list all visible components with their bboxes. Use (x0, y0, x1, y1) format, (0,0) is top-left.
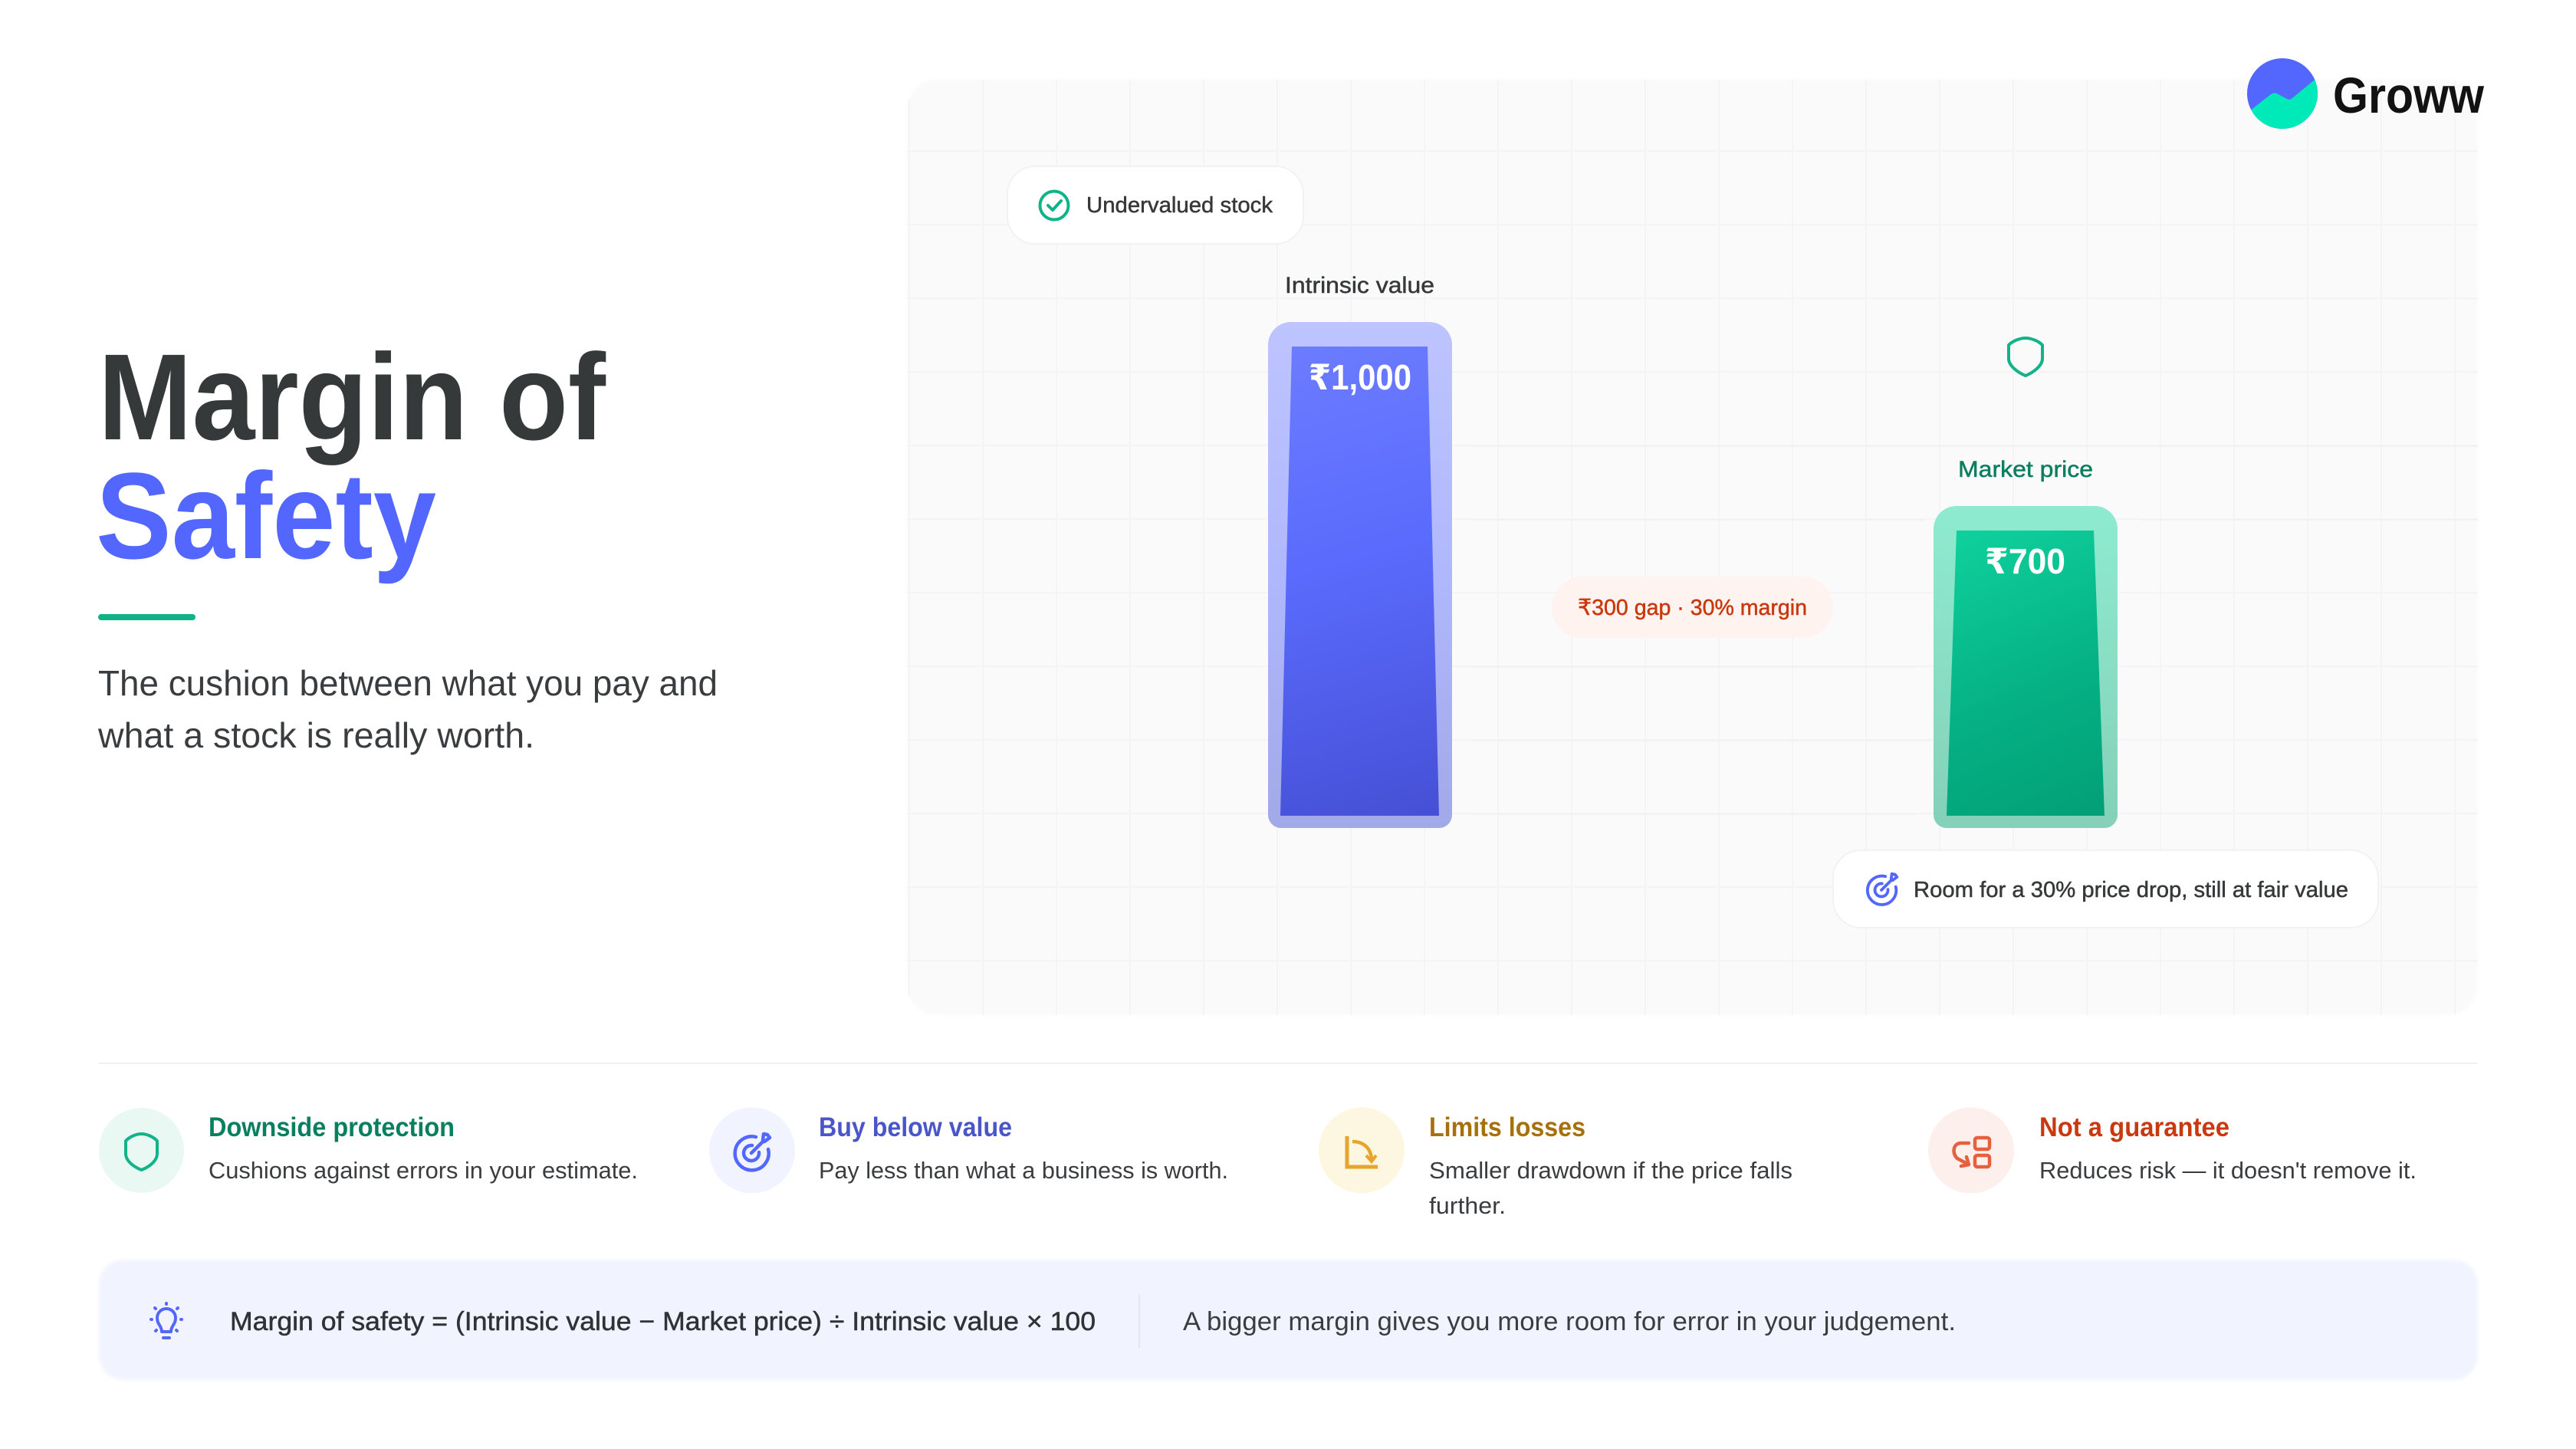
divider (98, 1063, 2478, 1064)
title: Margin of (98, 328, 606, 465)
subtitle: The cushion between what you pay and (98, 663, 718, 703)
logo: Groww (2242, 58, 2485, 134)
description: Reduces risk — it doesn't remove it. (2039, 1157, 2417, 1184)
bar label: Intrinsic value (1285, 273, 1434, 298)
chip: room for a price drop (1833, 850, 2378, 928)
gap pill: ₹300 gap · 30% margin (1578, 596, 1807, 620)
accent bar (98, 614, 196, 620)
bar value: ₹700 (1985, 541, 2065, 581)
formula: Margin of safety = (Intrinsic value − Market price) ÷ Intrinsic value × 100 (230, 1307, 1096, 1336)
subtitle: what a stock is really worth. (97, 715, 534, 755)
icon: shield above market price (2009, 338, 2042, 376)
gap pill (1552, 577, 1833, 638)
icon: target (709, 1107, 795, 1193)
icon: target (1868, 874, 1897, 905)
title: Safety (96, 447, 436, 584)
icon: check circle (1040, 192, 1069, 219)
heading: Limits losses (1429, 1112, 1585, 1142)
chip: undervalued stock (1007, 166, 1303, 244)
panel: value comparison chart (907, 80, 2478, 1015)
icon: swap boxes (1928, 1107, 2014, 1193)
formula bar (99, 1260, 2478, 1380)
feature: limits losses (1319, 1107, 1792, 1219)
bar label: Market price (1958, 457, 2093, 482)
description: Smaller drawdown if the price falls (1429, 1157, 1792, 1184)
bar value: ₹1,000 (1309, 357, 1411, 397)
bar: intrinsic value (1268, 273, 1452, 828)
heading: Downside protection (209, 1112, 455, 1142)
takeaway: A bigger margin gives you more room for error in your judgement. (1183, 1307, 1956, 1336)
heading: Buy below value (819, 1112, 1012, 1142)
bar: market price (1934, 457, 2118, 828)
description: Pay less than what a business is worth. (819, 1157, 1228, 1184)
chip label: Undervalued stock (1086, 193, 1273, 218)
feature: not a guarantee (1928, 1107, 2417, 1193)
icon: drawdown chart (1319, 1107, 1405, 1193)
heading: Not a guarantee (2039, 1112, 2229, 1142)
icon: light bulb (151, 1303, 182, 1338)
feature: limits losses: further. (1429, 1192, 1506, 1219)
subtitle (97, 663, 718, 755)
icon: shield (99, 1108, 184, 1193)
description: Cushions against errors in your estimate. (209, 1157, 638, 1184)
chip label: Room for a 30% price drop, still at fair value (1914, 878, 2348, 902)
feature: downside protection (99, 1108, 638, 1193)
logo: Groww: Groww (2333, 67, 2485, 123)
title (96, 328, 606, 584)
feature: buy below value (709, 1107, 1228, 1193)
